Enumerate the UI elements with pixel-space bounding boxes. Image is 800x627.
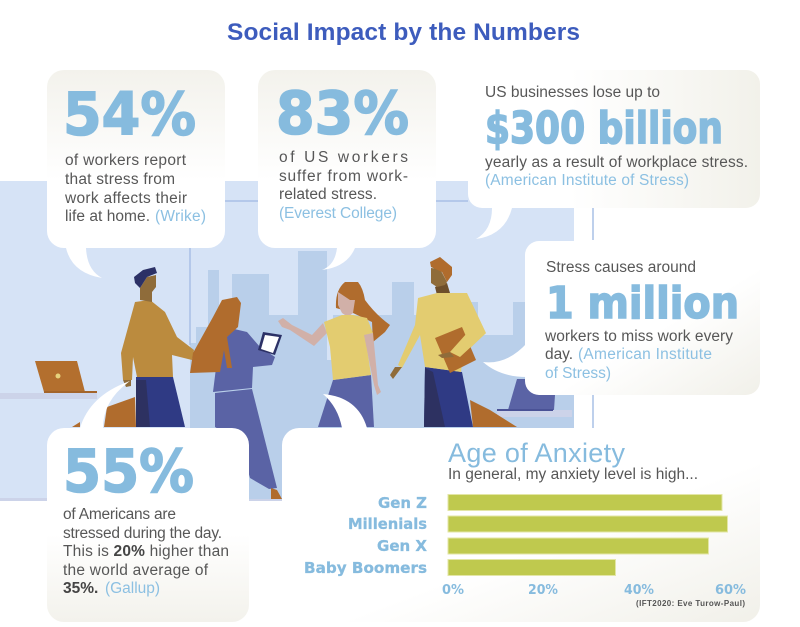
axis labels: 20% (528, 582, 558, 598)
chart heading: Age of Anxiety (448, 438, 626, 468)
panel: 54% of workers: of workers report (65, 152, 187, 169)
source note: (IFT2020: Eve Turow-Paul) (636, 599, 745, 608)
panel: 83% of US workers: of US workers (279, 149, 408, 166)
bar labels: Millenials (348, 515, 427, 533)
figure: woman with tablet (190, 297, 282, 499)
bar labels: Gen Z (378, 494, 427, 512)
panel: 55% of Americans: 55% (63, 436, 194, 506)
panel: 55% of Americans (47, 381, 249, 622)
panel: 1 million workers: of Stress) (545, 365, 611, 382)
title: Social Impact by the Numbers (227, 19, 580, 46)
chart subheading: In general, my anxiety level is high... (448, 466, 698, 483)
panel: 83% of US workers: suffer from work- (279, 168, 408, 185)
panel: 1 million workers (483, 241, 760, 395)
panel: 1 million workers: 1 million (546, 278, 739, 329)
chairs (72, 397, 517, 427)
panel: 55% of Americans: of Americans are (63, 506, 176, 523)
illustration: office scene with coworkers (0, 181, 593, 501)
panel: 83% of US workers: 83% (276, 78, 409, 148)
panel: 54% of workers (47, 70, 225, 278)
panel: 55% of Americans: the world average of (63, 562, 209, 579)
panel: 1 million workers: day. (545, 346, 573, 363)
panel: 55% of Americans: (Gallup) (105, 580, 160, 597)
figure: woman in yellow top (278, 282, 390, 427)
panel: $300 billion: (American Institute of Stress) (485, 172, 689, 189)
panel: $300 billion: yearly as a result of workplace stress. (485, 154, 748, 171)
panel: 55% of Americans: This is 20% higher than (63, 543, 229, 560)
panel: 55% of Americans: stressed during the day. (63, 525, 222, 542)
bar labels: Baby Boomers (304, 559, 427, 577)
axis labels (442, 582, 746, 598)
figure: man with folder (390, 257, 486, 427)
panel: 55% of Americans: 35%. (63, 580, 98, 597)
panel: 54% of workers: 54% (63, 80, 196, 148)
figure: man in mustard sweater (121, 267, 194, 427)
bar labels: Gen X (377, 537, 427, 555)
panel: 83% of US workers (258, 70, 436, 270)
desk and laptop right (497, 379, 572, 417)
desk and laptop left (0, 361, 97, 399)
panel: 54% of workers: that stress from (65, 171, 175, 188)
axis labels: 0% (442, 582, 464, 598)
panel: $300 billion: $300 billion (485, 103, 723, 154)
panel: Age of Anxiety chart (282, 394, 760, 622)
bar labels (304, 494, 427, 577)
panel: 1 million workers: workers to miss work every (544, 328, 733, 345)
panel: 54% of workers: (Wrike) (155, 208, 206, 225)
panel: $300 billion (468, 70, 760, 239)
bars (448, 494, 728, 576)
panel: 1 million workers: (American Institute (578, 346, 712, 363)
panel: 83% of US workers: (Everest College) (279, 205, 397, 222)
axis labels: 60% (715, 582, 746, 598)
panel: 1 million workers: Stress causes around (546, 259, 696, 276)
panel: 54% of workers: life at home. (65, 208, 150, 225)
panel: 83% of US workers: related stress. (279, 186, 377, 203)
panel: $300 billion: US businesses lose up to (485, 84, 660, 101)
axis labels: 40% (624, 582, 654, 598)
panel: 54% of workers: work affects their (64, 190, 187, 207)
